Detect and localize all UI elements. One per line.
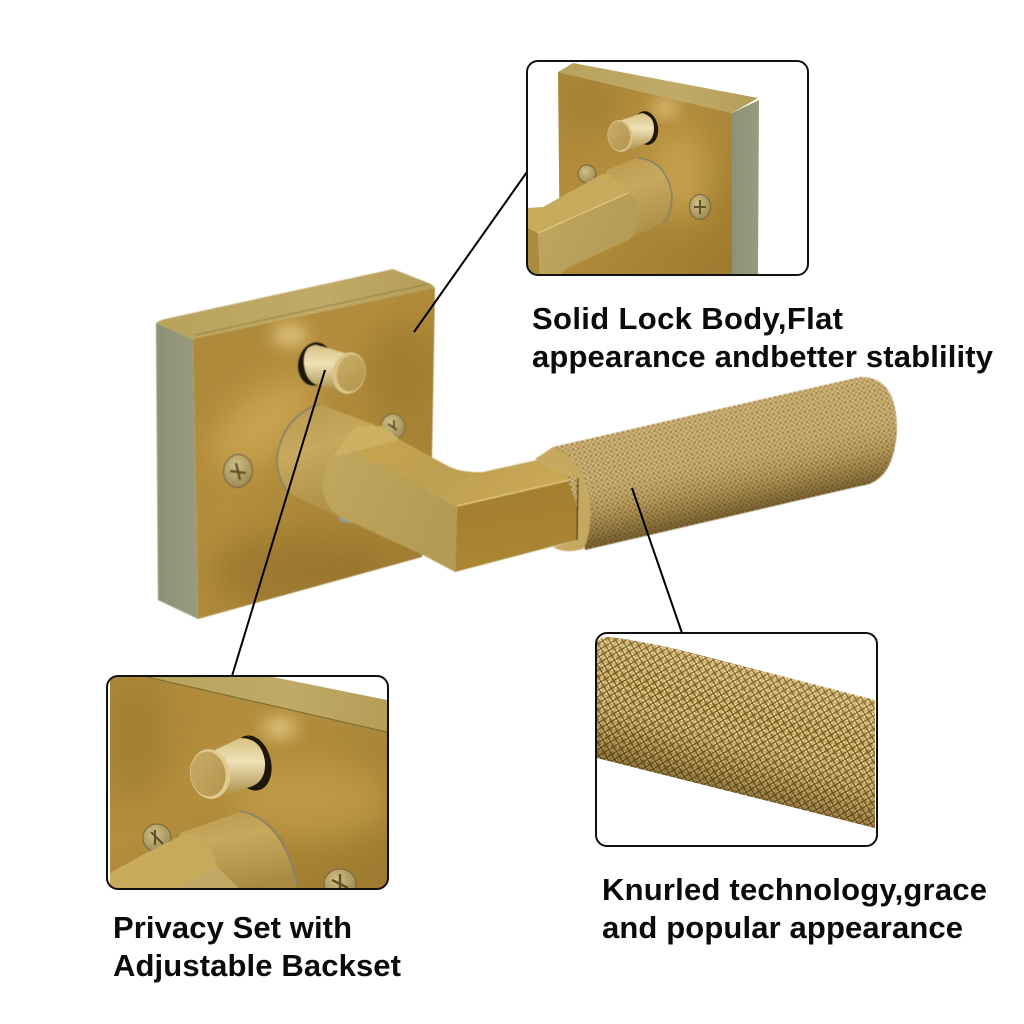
main product: door lever <box>156 269 897 619</box>
caption: knurled technology: Knurled technology,grace <box>602 872 987 907</box>
rose plate top bevel <box>156 269 435 339</box>
lever neck <box>110 834 240 889</box>
inset: solid lock body <box>527 61 808 275</box>
screw right <box>324 868 356 888</box>
screw left <box>143 824 171 852</box>
privacy thumb turn <box>294 339 370 397</box>
caption: knurled technology <box>602 872 987 945</box>
thumb turn <box>190 736 272 799</box>
knurled grip <box>535 377 897 551</box>
leader line: privacy set <box>232 370 325 676</box>
screw behind lever <box>578 165 596 183</box>
caption: privacy set: Adjustable Backset <box>113 948 401 983</box>
inset: privacy thumb turn <box>100 676 390 899</box>
rose plate front face <box>193 284 435 619</box>
caption: solid lock body <box>532 301 994 374</box>
caption: knurled technology: and popular appearance <box>602 910 963 945</box>
leader line: knurled <box>632 488 682 633</box>
cylinder base <box>606 157 673 238</box>
caption: solid lock body: Solid Lock Body,Flat <box>532 301 843 336</box>
caption: privacy set <box>113 910 401 983</box>
screw behind lever <box>381 414 405 440</box>
inset: knurled grip <box>596 633 877 846</box>
screw left <box>221 452 255 490</box>
lever cylinder base <box>277 404 390 523</box>
cylinder base <box>170 811 297 889</box>
caption: solid lock body: appearance andbetter stablility <box>532 339 994 374</box>
leader line: solid lock body <box>414 172 527 332</box>
rose plate side face <box>156 323 198 619</box>
grip collar <box>535 447 590 551</box>
lever arm <box>323 426 578 572</box>
thumb turn <box>607 111 658 152</box>
lever arm <box>528 174 640 275</box>
screw <box>690 194 710 220</box>
caption: privacy set: Privacy Set with <box>113 910 352 945</box>
